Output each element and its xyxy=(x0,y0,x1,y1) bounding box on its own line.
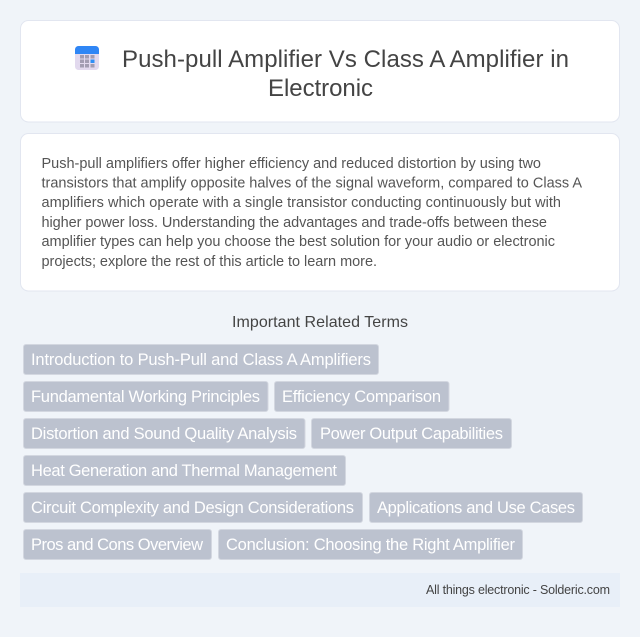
tag: heat generation xyxy=(24,456,346,486)
tag: working principles xyxy=(24,382,268,412)
tag: distortion: Distortion and Sound Quality Analysis xyxy=(31,425,297,443)
tag: efficiency: Efficiency Comparison xyxy=(282,388,441,406)
footer: All things electronic - Solderic.com xyxy=(426,583,610,597)
intro paragraph text xyxy=(42,156,582,270)
tag: conclusion xyxy=(218,530,522,560)
intro paragraph text: amplifier types can help you choose the best solution for your audio or electronic xyxy=(42,234,555,250)
tag: power output xyxy=(312,418,512,448)
tag: circuit complexity: Circuit Complexity and Design Considerations xyxy=(31,499,354,517)
tag: pros and cons: Pros and Cons Overview xyxy=(31,536,203,554)
icon: calendar xyxy=(75,46,99,70)
tag: heat generation: Heat Generation and Thermal Management xyxy=(31,462,337,480)
title xyxy=(122,46,569,102)
intro paragraph text: Push-pull amplifiers offer higher efficiency and reduced distortion by using two xyxy=(42,156,541,172)
tag: conclusion: Conclusion: Choosing the Right Amplifier xyxy=(226,536,516,554)
tag: power output: Power Output Capabilities xyxy=(320,425,503,443)
footer xyxy=(20,573,620,607)
tag: distortion xyxy=(24,418,305,448)
tag: efficiency xyxy=(274,382,449,412)
title: Push-pull Amplifier Vs Class A Amplifier in xyxy=(122,46,569,73)
heading: important related terms: Important Related Terms xyxy=(232,314,408,331)
tag: applications xyxy=(370,492,582,522)
intro paragraph text: transistors that amplify opposite halves of the signal waveform, compared to Class A xyxy=(42,176,582,192)
panel: title card xyxy=(20,20,620,122)
title: Electronic xyxy=(268,75,373,102)
panel: intro paragraph card xyxy=(20,134,620,291)
tag: pros and cons xyxy=(24,530,212,560)
tag: working principles: Fundamental Working Principles xyxy=(31,388,260,406)
tag list xyxy=(24,344,582,560)
intro paragraph text: projects; explore the rest of this article to learn more. xyxy=(42,254,377,270)
tag: introduction xyxy=(24,344,378,374)
tag: introduction: Introduction to Push-Pull and Class A Amplifiers xyxy=(31,351,371,369)
tag: circuit complexity xyxy=(24,492,362,522)
tag: applications: Applications and Use Cases xyxy=(377,499,575,517)
intro paragraph text: higher power loss. Understanding the advantages and trade-offs between these xyxy=(42,215,547,231)
intro paragraph text: amplifiers which operate with a single transistor conducting continuously but with xyxy=(42,195,561,211)
